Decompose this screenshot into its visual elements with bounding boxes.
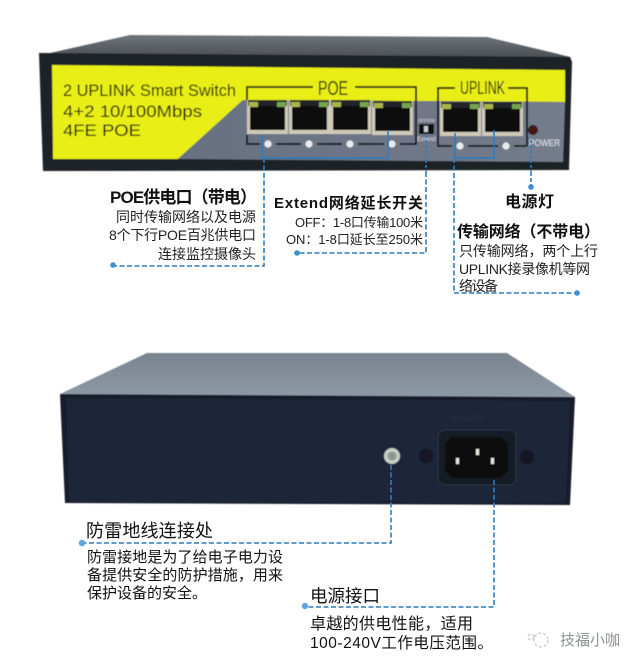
power LED bbox=[528, 126, 538, 134]
yellow label area bbox=[52, 65, 565, 159]
rear switch photo bbox=[60, 353, 575, 505]
text block: POE port bbox=[109, 188, 257, 262]
connector: POE ports bbox=[262, 130, 388, 158]
POE bracket bbox=[247, 87, 416, 144]
callout lines: front bbox=[113, 130, 577, 293]
POE heading: POE bbox=[318, 78, 348, 100]
leader dots: front bbox=[110, 184, 580, 296]
text block: extend switch: ON：1-8口延长至250米 bbox=[286, 232, 423, 247]
text block: power socket: 卓越的供电性能，适用 bbox=[310, 615, 473, 633]
leader: uplink bbox=[454, 158, 577, 293]
leader: power socket bbox=[305, 480, 494, 607]
text block: POE port: 连接监控摄像头 bbox=[158, 246, 256, 262]
top surface bbox=[60, 353, 575, 397]
text block: uplink: 传输网络（不带电） bbox=[457, 222, 600, 241]
text block: extend switch: Extend网络延长开关 bbox=[274, 194, 423, 212]
callout lines: rear bbox=[82, 465, 494, 607]
leader: power bbox=[530, 172, 532, 186]
connector: power LED bbox=[530, 140, 532, 172]
text block: ground: 防雷接地是为了给电子电力设 bbox=[87, 549, 283, 566]
text block: ground: 备提供安全的防护措施，用来 bbox=[87, 566, 283, 584]
text block: POE port: POE供电口（带电） bbox=[110, 188, 257, 207]
leader dots: rear bbox=[79, 540, 308, 609]
leader: POE bbox=[113, 158, 264, 266]
text block: ground: 防雷地线连接处 bbox=[86, 521, 213, 541]
text block: ground bbox=[86, 521, 283, 602]
extend switch: OFF/ON bbox=[418, 118, 435, 123]
model text: 4+2 10/100Mbps bbox=[63, 102, 202, 121]
power socket bbox=[438, 430, 516, 485]
uplink bracket bbox=[438, 88, 527, 146]
model text: 2 UPLINK Smart Switch bbox=[63, 81, 236, 100]
text block: uplink: UPLINK接录像机等网 bbox=[459, 261, 590, 277]
top surface bbox=[40, 35, 572, 62]
text block: extend switch bbox=[274, 194, 423, 247]
icon: wechat logo bbox=[528, 633, 548, 647]
top switch photo bbox=[39, 35, 572, 171]
front face bbox=[39, 53, 572, 171]
uplink heading: UPLINK bbox=[460, 78, 505, 98]
watermark bbox=[528, 632, 620, 649]
model text: 4FE POE bbox=[63, 121, 141, 140]
port numbers bbox=[260, 140, 514, 150]
text block: extend switch: OFF：1-8口传输100米 bbox=[295, 215, 423, 230]
connector: extend switch bbox=[425, 135, 427, 172]
leader: ground bbox=[82, 465, 391, 543]
mounting screw right bbox=[520, 450, 534, 464]
ground screw bbox=[384, 448, 400, 464]
mounting screw left bbox=[420, 450, 432, 462]
leader: extend bbox=[297, 172, 426, 253]
watermark name: 技福小咖 bbox=[560, 632, 620, 649]
text block: uplink: 只传输网络，两个上行 bbox=[459, 243, 598, 259]
connector: uplink ports bbox=[455, 130, 494, 158]
text block: uplink bbox=[457, 222, 600, 294]
text block: power socket bbox=[310, 586, 493, 652]
text block: POE port: 8个下行POE百兆供电口 bbox=[109, 227, 256, 243]
rear face bbox=[60, 394, 575, 505]
uplink ports bbox=[440, 102, 523, 136]
text block: ground: 保护设备的安全。 bbox=[87, 584, 207, 602]
text block: power socket: 电源接口 bbox=[310, 586, 380, 606]
text block: uplink: 络设备 bbox=[459, 278, 498, 294]
voltage label: 100-240V bbox=[450, 414, 485, 423]
extend switch bbox=[417, 118, 436, 143]
text block: POE port: 同时传输网络以及电源 bbox=[116, 209, 256, 225]
text block: power light: 电源灯 bbox=[505, 193, 554, 211]
power label: POWER bbox=[529, 138, 560, 148]
gray panel bbox=[178, 100, 565, 162]
text block: power socket: 100-240V工作电压范围。 bbox=[310, 634, 493, 652]
extend switch: Extend bbox=[417, 137, 436, 143]
model text bbox=[63, 81, 236, 140]
POE ports bbox=[247, 100, 413, 135]
